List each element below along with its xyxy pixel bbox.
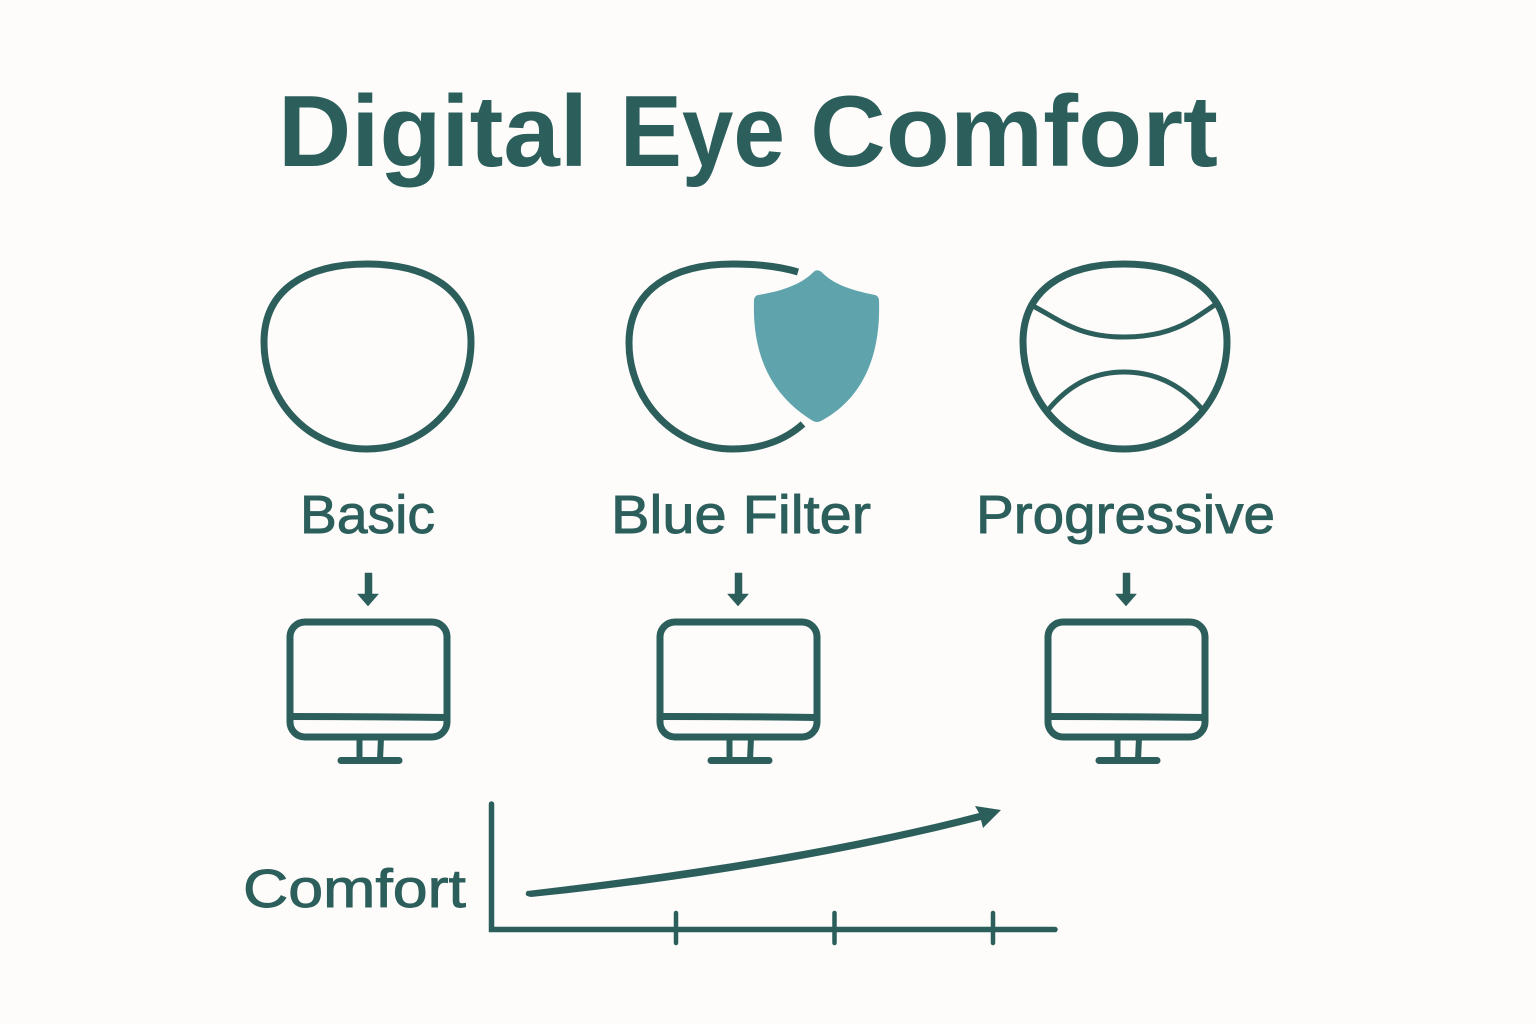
label: progressive: Progressive bbox=[976, 485, 1275, 545]
title: Digital bbox=[278, 76, 588, 188]
icon: arrow and monitor bbox=[290, 573, 447, 760]
panel: progressive lens option bbox=[976, 264, 1275, 760]
label: blue filter: Blue Filter bbox=[611, 485, 871, 545]
icon: progressive lens bbox=[1023, 264, 1227, 449]
panel: basic lens option bbox=[264, 264, 471, 760]
icon: basic lens bbox=[264, 264, 471, 449]
icon: lens arc bbox=[629, 264, 803, 449]
chart: comfort trend bbox=[243, 804, 1055, 943]
icon: arrow and monitor bbox=[660, 573, 817, 760]
icon: shield bbox=[754, 270, 879, 422]
axes bbox=[492, 804, 1055, 930]
label: basic: Basic bbox=[300, 485, 435, 545]
title: Comfort bbox=[810, 76, 1218, 188]
rising arrow bbox=[526, 806, 1001, 897]
title: Eye bbox=[620, 76, 785, 188]
title bbox=[278, 76, 1218, 188]
panel: blue filter lens option bbox=[611, 264, 879, 760]
axis label: Comfort bbox=[243, 859, 466, 919]
ticks bbox=[676, 913, 993, 943]
icon: arrow and monitor bbox=[1048, 573, 1205, 760]
